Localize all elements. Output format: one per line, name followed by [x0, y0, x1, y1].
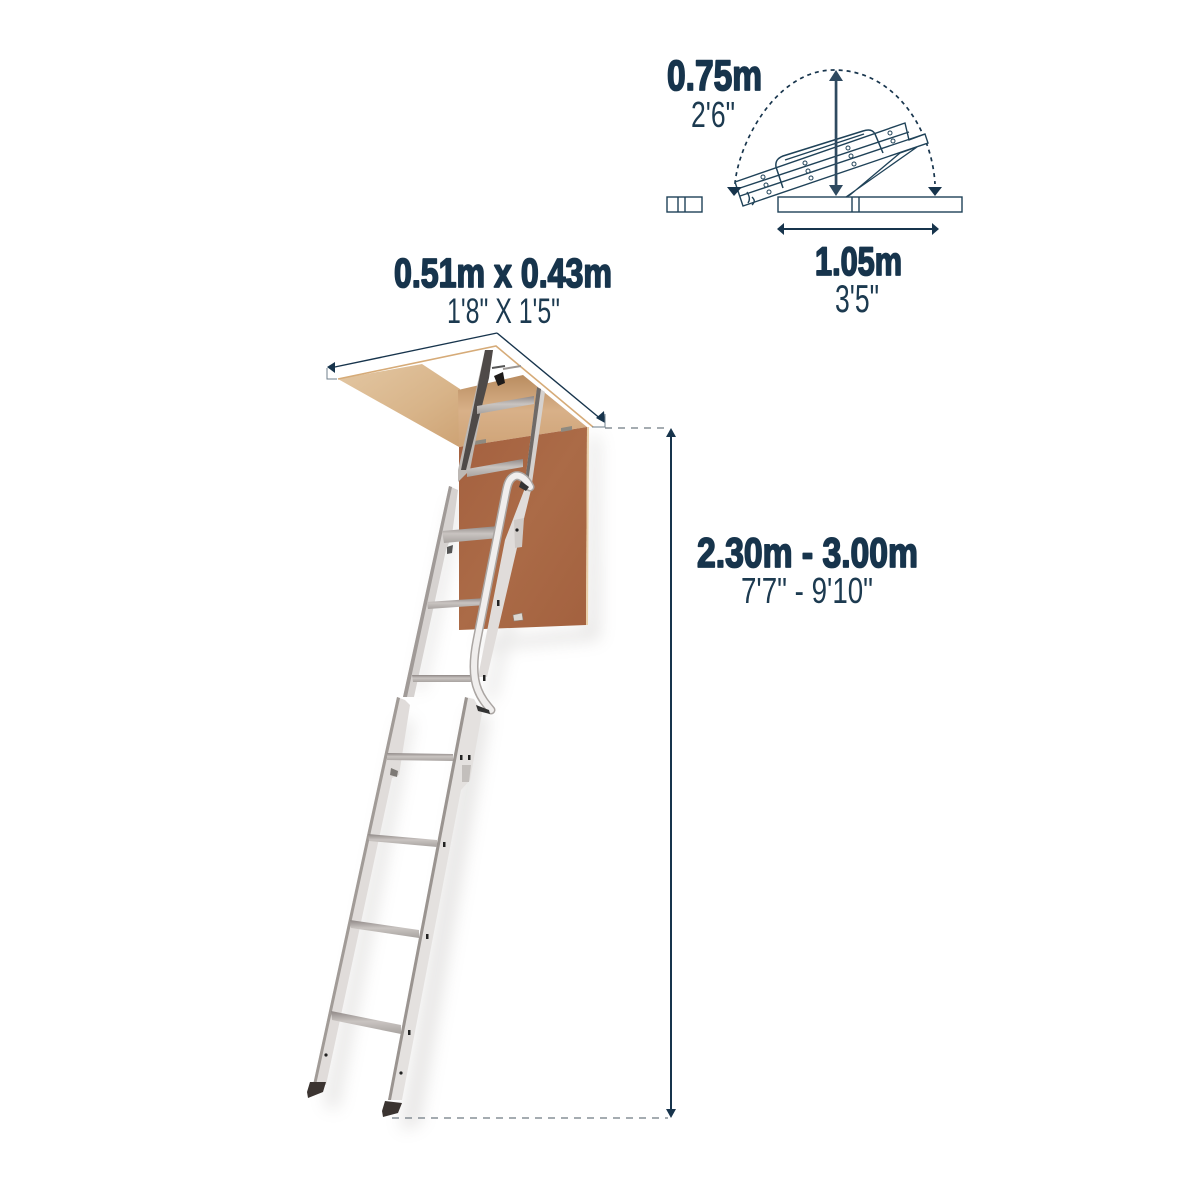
left foot: [307, 1082, 326, 1098]
folded ladder: [735, 123, 928, 206]
label: 7'7" - 9'10": 7'7" - 9'10": [741, 570, 873, 611]
ladder: [307, 350, 545, 1117]
top section rails: [458, 350, 545, 490]
clearance arc: [735, 70, 935, 184]
hatch width and depth arrows: [327, 333, 605, 427]
label: 3'5": 3'5": [835, 278, 879, 321]
brown door panel: [459, 427, 587, 630]
height dimension: [392, 428, 676, 1118]
label: 1'8" x 1'5": 1'8" X 1'5": [447, 292, 560, 331]
right swing arrowhead: [928, 187, 942, 196]
ladder drop shadow: [324, 432, 600, 1130]
handrail top clamp: [519, 481, 529, 491]
right joist: [778, 197, 962, 212]
door fitting: [513, 613, 523, 621]
height arrow: [666, 428, 676, 1118]
hinges: [474, 426, 572, 445]
label: 2'6": 2'6": [691, 94, 735, 135]
label: 1.05m: 1.05m: [815, 240, 902, 284]
white frame: [338, 346, 593, 427]
right foot: [382, 1101, 402, 1117]
lower section rails: [313, 697, 482, 1100]
label: 0.51m x 0.43m: 0.51m x 0.43m: [394, 250, 612, 296]
width arrow: [327, 333, 497, 379]
left joist: [667, 197, 702, 212]
lower dashed leader: [392, 1117, 668, 1119]
loft hatch: [338, 346, 593, 630]
depth arrow: [497, 333, 605, 427]
frame edge: [338, 346, 593, 427]
width arrow: [777, 223, 939, 235]
back wooden panel: [458, 375, 587, 447]
handrail bottom clamp: [476, 705, 490, 714]
handrail: [474, 476, 530, 710]
label: 2.30m - 3.00m: 2.30m - 3.00m: [697, 529, 918, 576]
rungs: [331, 396, 534, 1034]
folding clearance diagram: [667, 70, 962, 235]
middle section rails: [403, 486, 531, 697]
label: 0.75m: 0.75m: [667, 52, 762, 100]
left wooden box side: [338, 364, 461, 447]
left swing arrowhead: [727, 187, 742, 196]
upper dashed leader: [605, 427, 668, 429]
height arrow: [829, 70, 843, 196]
support brace: [846, 147, 917, 197]
